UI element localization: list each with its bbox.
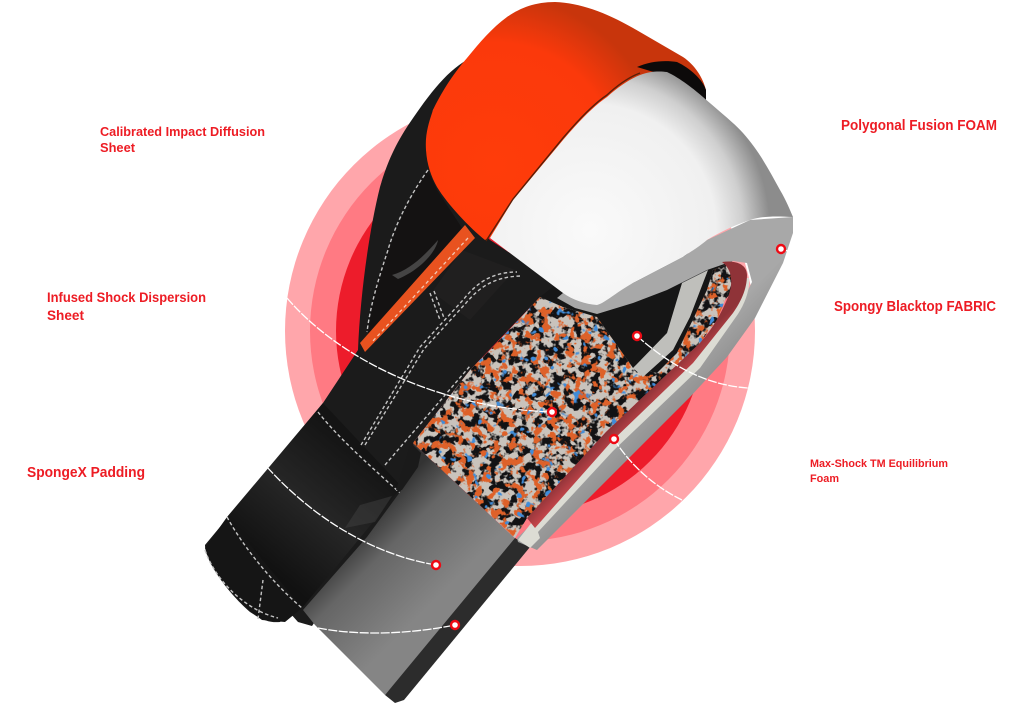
label: calibrated impact diffusion sheet: Calibrated Impact Diffusion xyxy=(100,124,265,139)
dark blacktop edge layer xyxy=(385,538,530,703)
glossy side panel xyxy=(368,170,462,335)
mesh panel xyxy=(432,250,515,320)
white liner strip along wall xyxy=(518,278,749,548)
gloss highlight xyxy=(392,240,438,279)
wrist strap segment xyxy=(227,403,402,608)
orange leather flap xyxy=(426,2,706,240)
grey side wall and foam lip xyxy=(517,217,793,550)
label: max-shock equilibrium foam: Foam xyxy=(810,473,839,485)
label: calibrated impact diffusion sheet: Sheet xyxy=(100,140,136,155)
speckled rebond foam xyxy=(413,265,732,538)
leader: lower sheet xyxy=(318,625,455,633)
strap soft highlight xyxy=(345,496,392,528)
orange trim strip xyxy=(360,225,475,352)
label: spongex padding: SpongeX Padding xyxy=(27,464,145,481)
label: calibrated impact diffusion sheet xyxy=(100,124,265,155)
lower cuff segment xyxy=(205,517,302,622)
cavity backing xyxy=(540,250,738,385)
label: polygonal fusion foam: Polygonal Fusion FOAM xyxy=(841,117,997,134)
stitching xyxy=(205,170,520,619)
leader: max-shock foam xyxy=(614,439,682,500)
concentric red target circles xyxy=(285,96,755,566)
callout dots xyxy=(432,245,785,629)
label: infused shock dispersion sheet xyxy=(47,289,206,323)
white inner liner band xyxy=(633,270,708,377)
leader: spongy blacktop fabric xyxy=(637,336,748,388)
small black tab above block xyxy=(396,443,421,490)
red layer strip xyxy=(527,262,747,528)
leader: polygonal fusion foam xyxy=(781,249,791,252)
flap edge shadow xyxy=(486,73,640,241)
label: max-shock equilibrium foam: Max-Shock TM Equilibrium xyxy=(810,458,948,470)
callout lines and dots xyxy=(267,245,791,633)
label: infused shock dispersion sheet: Sheet xyxy=(47,307,84,323)
leader: spongex padding xyxy=(267,467,436,565)
label: max-shock equilibrium foam xyxy=(810,458,948,485)
white polygonal fusion foam xyxy=(490,71,793,305)
label: infused shock dispersion sheet: Infused Shock Dispersion xyxy=(47,289,206,305)
leader: infused shock dispersion sheet xyxy=(287,298,552,412)
black glove body xyxy=(205,60,590,626)
grey outer sole block xyxy=(303,443,520,695)
label: spongy blacktop fabric: Spongy Blacktop FABRIC xyxy=(834,298,996,315)
